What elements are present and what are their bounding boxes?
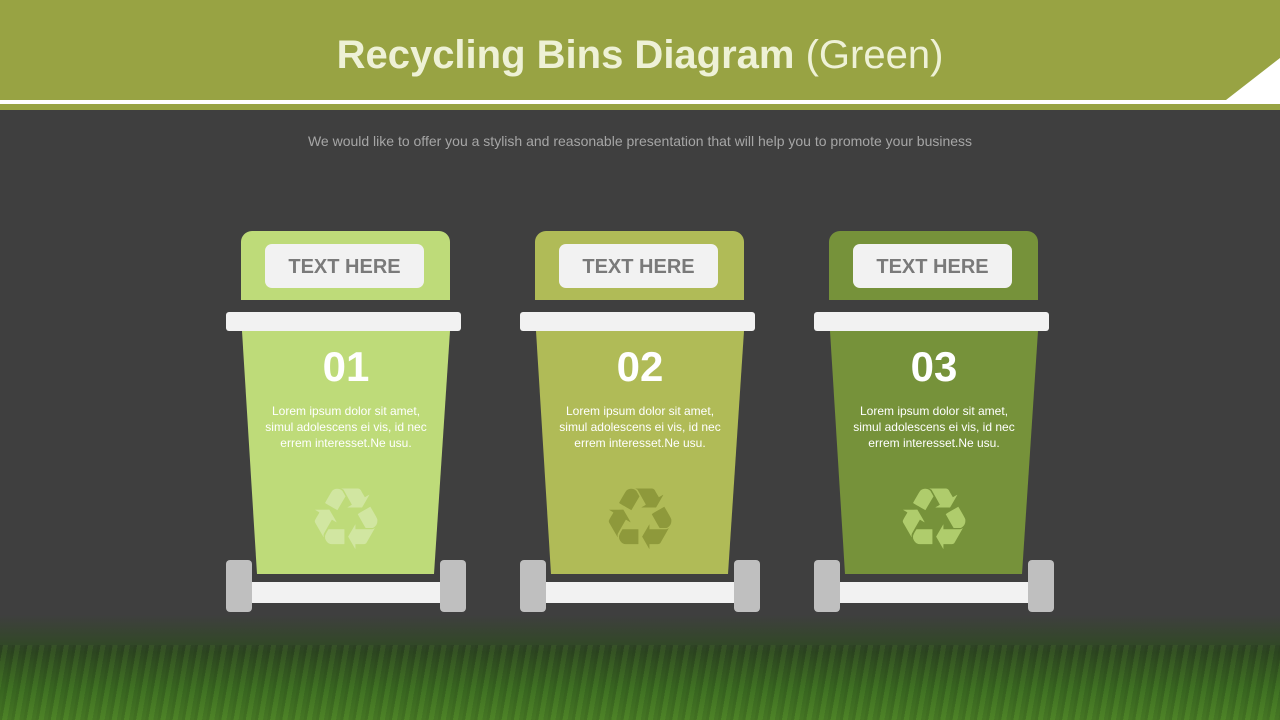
bin 03	[814, 231, 1054, 612]
rim 01	[226, 312, 461, 331]
title: Recycling Bins Diagram (Green)	[337, 33, 943, 77]
wheel right 02	[734, 560, 760, 612]
lid 03	[829, 231, 1038, 300]
text 01: Lorem ipsum dolor sit amet, simul adolescens ei vis, id nec errem interesset.Ne usu.	[265, 404, 427, 450]
number 03: 03	[911, 343, 957, 390]
bin 01	[226, 231, 466, 612]
number 01: 01	[323, 343, 369, 390]
icon: recycle 02: ♻	[601, 470, 679, 570]
axle 01	[252, 582, 440, 603]
number 02: 02	[617, 343, 663, 390]
lid 01	[241, 231, 450, 300]
wheel left 02	[520, 560, 546, 612]
rim 03	[814, 312, 1049, 331]
wheel right 01	[440, 560, 466, 612]
icon: recycle 01: ♻	[307, 470, 385, 570]
rim 02	[520, 312, 755, 331]
label 01	[265, 244, 424, 288]
text 03: Lorem ipsum dolor sit amet, simul adolescens ei vis, id nec errem interesset.Ne usu.	[853, 404, 1015, 450]
label 03: TEXT HERE	[876, 256, 989, 278]
wheel right 03	[1028, 560, 1054, 612]
lid 02	[535, 231, 744, 300]
body 02	[536, 331, 744, 574]
header band	[0, 0, 1280, 110]
label 02	[559, 244, 718, 288]
text 02: Lorem ipsum dolor sit amet, simul adolescens ei vis, id nec errem interesset.Ne usu.	[559, 404, 721, 450]
grass	[0, 615, 1280, 720]
wheel left 01	[226, 560, 252, 612]
icon: recycle 03: ♻	[895, 470, 973, 570]
label 01: TEXT HERE	[288, 256, 401, 278]
body 03	[830, 331, 1038, 574]
body 01	[242, 331, 450, 574]
bin 02	[520, 231, 760, 612]
axle 03	[840, 582, 1028, 603]
axle 02	[546, 582, 734, 603]
subtitle: We would like to offer you a stylish and reasonable presentation that will help you to promote your business	[308, 133, 972, 149]
wheel left 03	[814, 560, 840, 612]
label 03	[853, 244, 1012, 288]
label 02: TEXT HERE	[582, 256, 695, 278]
